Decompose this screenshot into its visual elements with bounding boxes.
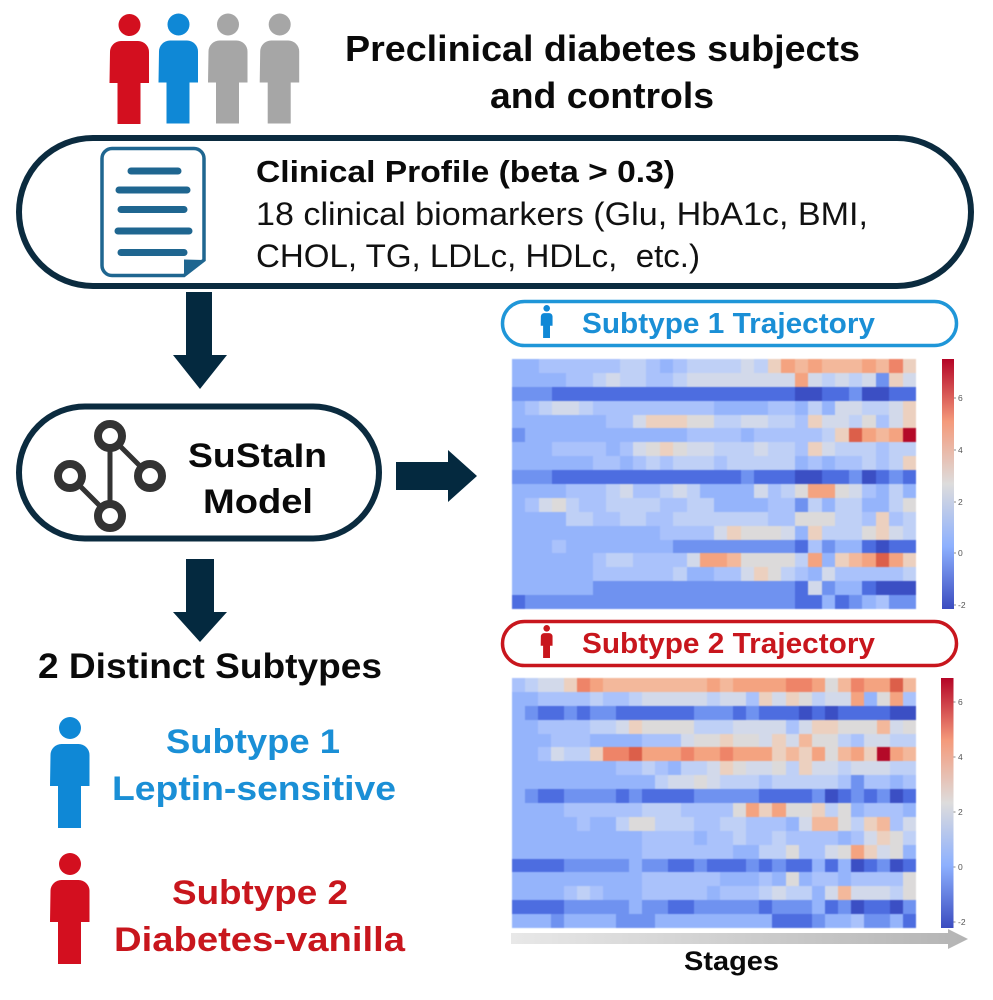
heatmap: subtype 1 trajectory xyxy=(511,358,917,610)
colorbar: subtype 1: 2 xyxy=(958,497,963,507)
colorbar: subtype 2: 6 xyxy=(958,697,963,707)
colorbar: subtype 2: 0 xyxy=(958,862,963,872)
arrow: model to subtypes xyxy=(173,559,227,642)
text: subtype 1: Leptin-sensitive xyxy=(112,770,396,808)
text: SuStaIn Model: SuStaIn xyxy=(188,437,327,475)
icon: group of four people xyxy=(110,14,299,124)
heading: subtype 2 trajectory xyxy=(502,622,956,666)
text: subtype 2: Subtype 2 xyxy=(172,874,348,912)
heading: subtype 1 trajectory: Subtype 1 Trajectory xyxy=(582,308,875,340)
arrow: stages axis xyxy=(511,929,968,949)
text: biomarkers: 18 clinical biomarkers (Glu, HbA1c, BMI, xyxy=(256,196,868,232)
text: subtype 1 xyxy=(112,723,396,808)
text: biomarkers: CHOL, TG, LDLc, HDLc, etc.) xyxy=(256,238,700,274)
text: SuStaIn Model xyxy=(188,437,327,521)
colorbar: subtype 2: -2 xyxy=(958,917,966,927)
title xyxy=(345,28,860,116)
title: Preclinical diabetes subjects xyxy=(345,28,860,69)
colorbar: subtype 2: 4 xyxy=(958,752,963,762)
heading: clinical profile: Clinical Profile (beta > 0.3) xyxy=(256,154,675,189)
icon: subtype 2 person xyxy=(50,853,90,964)
heading: subtype 2 trajectory: Subtype 2 Trajectory xyxy=(582,628,875,660)
arrow: clinical profile to model xyxy=(173,292,227,389)
colorbar: subtype 2 xyxy=(941,678,966,928)
heading: 2 distinct subtypes: 2 Distinct Subtypes xyxy=(38,647,382,686)
icon: network xyxy=(58,424,162,528)
label: stages: Stages xyxy=(684,946,779,976)
colorbar: subtype 1 xyxy=(942,359,966,610)
colorbar: subtype 1: -2 xyxy=(958,600,966,610)
colorbar: subtype 1: 0 xyxy=(958,548,963,558)
text: subtype 1: Subtype 1 xyxy=(166,723,340,761)
colorbar: subtype 1: 4 xyxy=(958,445,963,455)
text: subtype 2: Diabetes-vanilla xyxy=(114,921,406,959)
text: subtype 2 xyxy=(114,874,406,959)
heading: subtype 1 trajectory xyxy=(502,302,956,346)
text: biomarkers xyxy=(256,196,868,274)
panel: clinical profile xyxy=(19,138,971,286)
colorbar: subtype 1: 6 xyxy=(958,393,963,403)
icon: document xyxy=(102,148,204,276)
title: and controls xyxy=(490,75,714,116)
icon: subtype 1 person xyxy=(50,717,90,828)
arrow: model to trajectories xyxy=(396,450,477,502)
text: SuStaIn Model: Model xyxy=(203,483,313,521)
heatmap: subtype 2 trajectory xyxy=(511,677,917,929)
panel: SuStaIn model xyxy=(19,406,379,538)
colorbar: subtype 2: 2 xyxy=(958,807,963,817)
